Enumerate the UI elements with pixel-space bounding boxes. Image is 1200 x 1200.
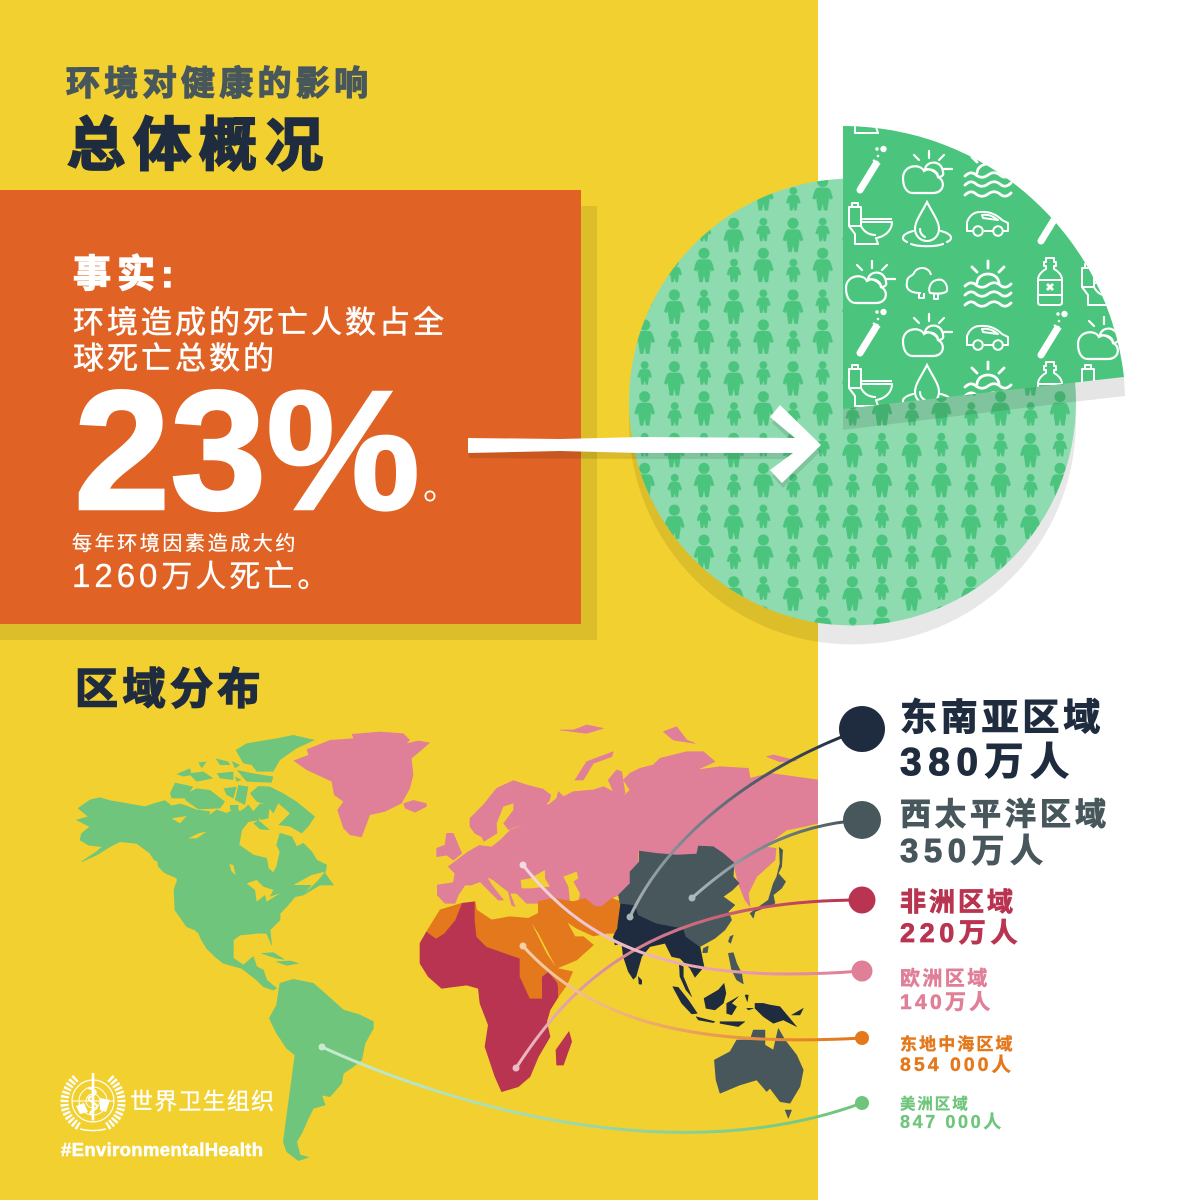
annual deaths figure: 万人死亡。 xyxy=(161,559,331,594)
chart: pie of global deaths xyxy=(629,92,1127,626)
legend: Africa: 非洲区域 xyxy=(900,887,1016,917)
Western Pacific region xyxy=(618,846,803,1118)
legend: Europe: 欧洲区域 xyxy=(900,967,990,990)
wedge shadow xyxy=(843,377,1125,430)
map: inland seas and Africa xyxy=(420,803,623,1092)
map: North American lakes and gulfs xyxy=(153,816,325,902)
world map xyxy=(77,725,818,1161)
panel: fact box xyxy=(0,190,597,640)
legend: Africa xyxy=(848,886,1022,948)
legend: Eastern Mediterranean: 854 000人 xyxy=(900,1054,1014,1076)
line: Western Pacific xyxy=(692,820,862,898)
legend: Americas: 美洲区域 xyxy=(900,1094,970,1113)
pie slice: 23 percent environmental xyxy=(843,126,1124,409)
pie shadow xyxy=(629,198,1076,644)
map: Greenland and Eurasia xyxy=(293,725,818,907)
South-East Asia region xyxy=(613,903,803,1027)
fact heading: 事实: xyxy=(73,254,180,296)
line start dots xyxy=(318,862,696,1072)
legend: Europe xyxy=(852,960,994,1014)
heading: main title: 总体概况 xyxy=(67,113,331,178)
legend: Eastern Mediterranean: 东地中海区域 xyxy=(900,1034,1015,1054)
legend: Americas: 847 000人 xyxy=(900,1112,1004,1132)
legend: Africa: 220万人 xyxy=(900,918,1022,948)
arrow from percentage to pie slice xyxy=(468,405,821,488)
line: Europe xyxy=(523,865,862,974)
map: Baja gulf xyxy=(194,930,202,942)
line: Eastern Mediterranean xyxy=(523,946,862,1040)
annual deaths figure: 1260 xyxy=(72,557,161,594)
line: Americas xyxy=(322,1047,862,1132)
legend: Eastern Mediterranean xyxy=(855,1031,1015,1076)
legend: Western Pacific xyxy=(843,797,1110,869)
icon: WHO emblem xyxy=(64,1073,122,1130)
annual deaths text: 每年环境因素造成大约 xyxy=(72,532,298,555)
legend: South-East Asia xyxy=(839,697,1104,784)
heading: subtitle: 环境对健康的影响 xyxy=(66,65,372,103)
Eastern Mediterranean region xyxy=(427,898,623,998)
Red Sea xyxy=(532,923,556,967)
heading: regional distribution: 区域分布 xyxy=(75,666,265,714)
map: Americas xyxy=(77,735,373,1161)
legend: Western Pacific: 西太平洋区域 xyxy=(900,797,1110,832)
fact description: 环境造成的死亡人数占全 xyxy=(73,305,447,340)
legend: Americas xyxy=(855,1094,1004,1132)
organization name: 世界卫生组织 xyxy=(130,1088,275,1114)
line: South-East Asia xyxy=(630,729,862,917)
big percentage: 23% xyxy=(74,356,420,546)
inland seas xyxy=(478,803,580,902)
yellow background panel xyxy=(0,0,818,1200)
legend: South-East Asia: 东南亚区域 xyxy=(900,697,1104,738)
fact description: 球死亡总数的 xyxy=(73,341,277,376)
Africa xyxy=(420,902,572,1092)
legend: Western Pacific: 350万人 xyxy=(900,832,1049,869)
full stop after percentage xyxy=(425,491,435,501)
legend: Europe: 140万人 xyxy=(900,991,994,1014)
legend: South-East Asia: 380万人 xyxy=(900,741,1076,784)
people pattern xyxy=(629,178,1076,626)
connector lines xyxy=(322,729,862,1132)
environmental icons pattern xyxy=(844,126,1119,407)
line: Africa xyxy=(516,900,862,1068)
hashtag: #EnvironmentalHealth xyxy=(61,1139,263,1160)
